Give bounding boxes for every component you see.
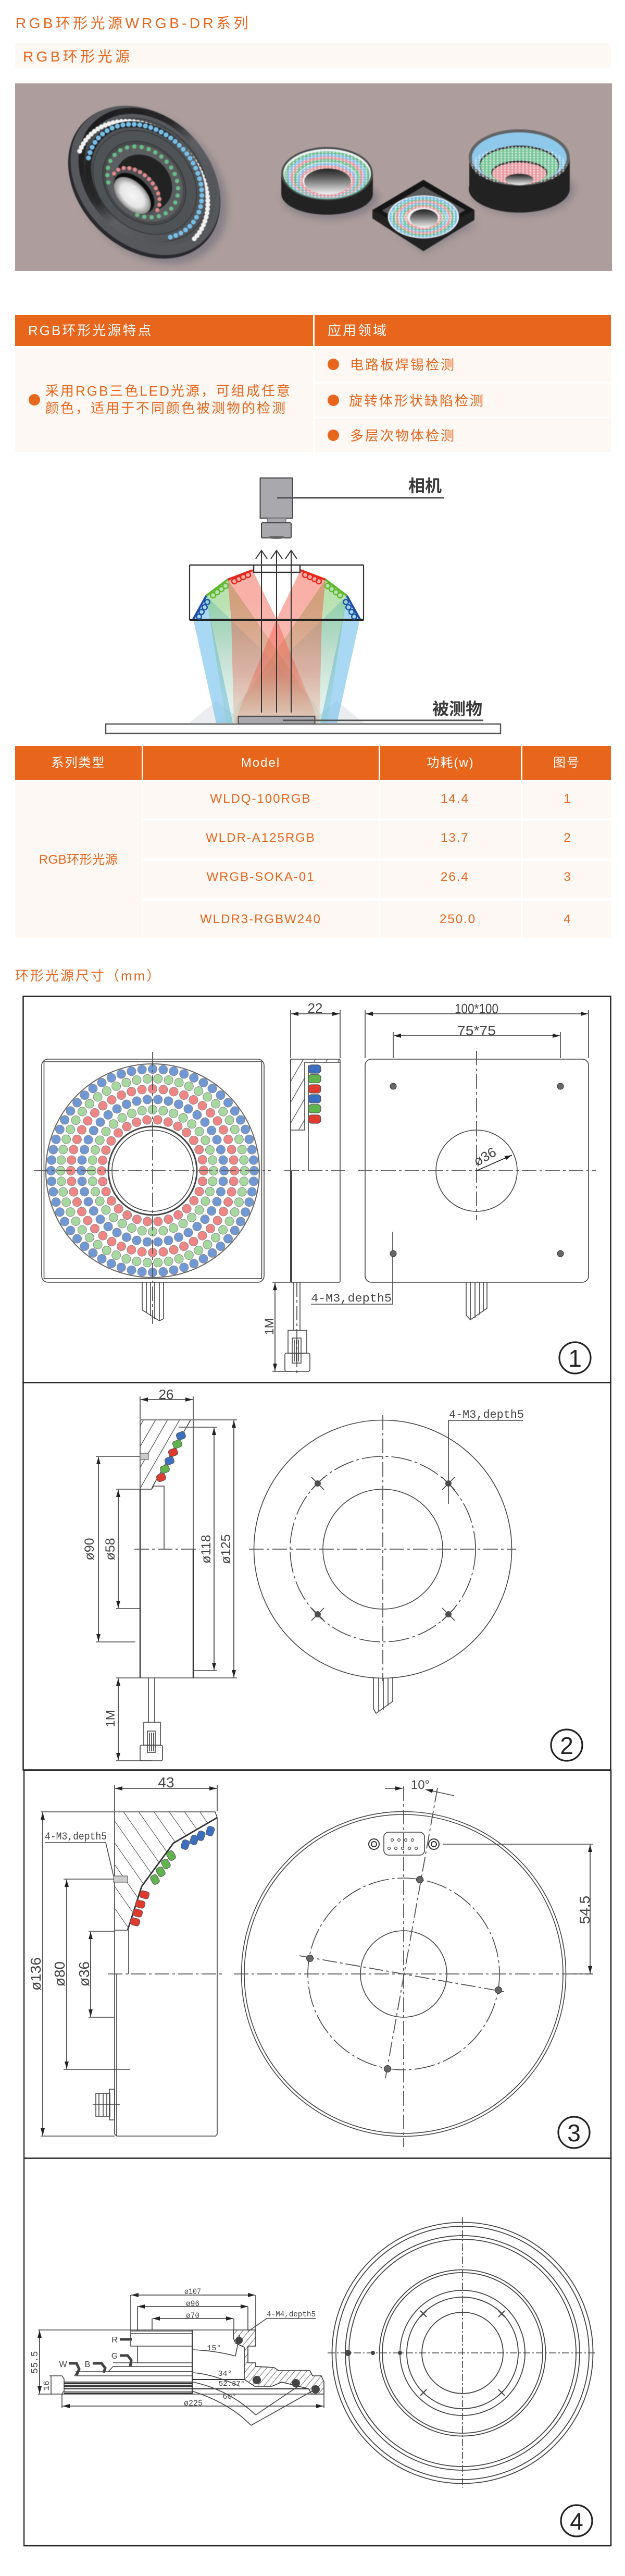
large stacked ring light (38, 76, 258, 295)
figure number 3 (558, 2117, 590, 2148)
header row (15, 746, 611, 780)
description text: 采用RGB三色LED光源，可组成任意 (45, 383, 292, 399)
section view: G (111, 2352, 118, 2361)
callout 4-M3,depth5: 4-M3,depth5 (311, 1292, 392, 1305)
cell: application 2: 旋转体形状缺陷检测 (349, 393, 485, 409)
camera (260, 478, 293, 539)
row 2 (143, 820, 611, 858)
cylinder ring light (469, 129, 574, 215)
section view: 4-M4,depth5 (267, 2310, 316, 2319)
side view: 22 (308, 1000, 322, 1016)
front view with LED rings (34, 1052, 271, 1324)
section view: ø80 (52, 1961, 68, 1986)
round ring light (281, 147, 378, 219)
cell: feature description (15, 348, 313, 452)
drawing 3: large ring light (23, 1770, 611, 2159)
header: features: RGB环形光源特点 (28, 323, 153, 338)
cell: application 1 (315, 348, 611, 382)
section view: 16 (42, 2381, 52, 2391)
front view (249, 1415, 516, 1713)
cell: application 3 (315, 419, 611, 452)
callout 4-M3,depth5 (311, 1232, 393, 1305)
section view: ø58 (103, 1538, 118, 1561)
section view: 26 (159, 1387, 173, 1402)
row 1: 14.4 (441, 792, 469, 806)
header row: 图号 (553, 756, 580, 770)
figure number 4 (561, 2505, 592, 2536)
drawing 4: stacked ring light (23, 2157, 611, 2547)
row 4: 250.0 (440, 912, 476, 926)
optical diagram: camera, ring light and object (105, 476, 501, 734)
left LED chain (193, 570, 253, 619)
section view: W (59, 2360, 67, 2369)
spec table (15, 746, 611, 938)
front view: 54.5 (577, 1896, 593, 1924)
cell: application 1: 电路板焊锡检测 (350, 357, 456, 373)
row 3: WRGB-SOKA-01 (206, 870, 315, 884)
callout 4-M3,depth5: 4-M3,depth5 (449, 1408, 524, 1421)
back view: ø36 (471, 1144, 499, 1169)
back view: 100*100 (455, 1001, 498, 1016)
section view (30, 2287, 324, 2425)
section view: ø36 (76, 1961, 92, 1986)
section view: 43 (158, 1774, 174, 1790)
band heading: RGB环形光源 (23, 48, 132, 65)
bullet (29, 394, 40, 406)
square ring light (372, 180, 477, 253)
row 3 (143, 861, 611, 898)
figure number 4: 4 (570, 2508, 583, 2535)
section view: ø125 (219, 1535, 233, 1564)
inspected object (239, 716, 315, 724)
upward arrows (256, 550, 297, 713)
ring light housing (190, 565, 364, 620)
section view: 15° (207, 2344, 221, 2353)
figure number 3: 3 (567, 2119, 581, 2146)
section view: ø225 (184, 2399, 203, 2408)
callout 4-M3,depth5: 4-M3,depth5 (45, 1831, 107, 1843)
right LED chain (301, 570, 360, 619)
stage (106, 724, 501, 733)
front view (328, 2217, 597, 2488)
header: features (15, 315, 313, 346)
callout 4-M3,depth5 (45, 1831, 114, 1876)
section view: ø118 (199, 1535, 214, 1564)
cell: application 3: 多层次物体检测 (350, 428, 456, 444)
series cell (15, 782, 142, 938)
cell: application 2 (315, 384, 611, 416)
label: camera: 相机 (408, 476, 442, 495)
section view: 60° (222, 2393, 237, 2401)
label: inspected object: 被测物 (432, 700, 482, 718)
section view: 52.37° (219, 2380, 245, 2388)
dimensions heading: 环形光源尺寸（mm） (15, 968, 161, 984)
header: applications (315, 315, 611, 346)
row 4 (143, 901, 611, 938)
side view (262, 1000, 345, 1375)
header row: Model (241, 756, 280, 770)
title: RGB环形光源WRGB-DR系列 (16, 15, 251, 31)
section view: R (111, 2336, 118, 2345)
section view: 1M (104, 1710, 118, 1727)
figure number 2 (551, 1729, 582, 1761)
row 3: 3 (564, 870, 572, 884)
row 2: 2 (564, 831, 572, 845)
front view: 10° (411, 1778, 430, 1792)
side view: 1M (262, 1318, 277, 1335)
features table (15, 315, 611, 452)
header row: 功耗(w) (427, 756, 474, 770)
cell: feature description: 颜色，适用于不同颜色被测物的检测 (45, 400, 287, 416)
row 2: 13.7 (441, 831, 469, 845)
row 1: WLDQ-100RGB (210, 792, 311, 806)
drawing 2: round ring light (22, 1382, 611, 1771)
series cell: RGB环形光源 (39, 853, 118, 867)
callout 4-M3,depth5 (448, 1408, 524, 1504)
section view: B (85, 2360, 90, 2369)
section view: ø70 (186, 2311, 199, 2321)
row 1 (143, 782, 611, 818)
drawing 1: square ring light (22, 996, 611, 1383)
figure number 1: 1 (568, 1345, 582, 1372)
figure number 2: 2 (560, 1732, 573, 1759)
header row: 系列类型 (51, 756, 105, 770)
section view (82, 1387, 237, 1761)
front view (234, 1778, 593, 2147)
header: applications: 应用领域 (328, 323, 388, 338)
section view: ø107 (184, 2287, 201, 2297)
row 4: WLDR3-RGBW240 (200, 912, 321, 926)
back view: 75*75 (457, 1023, 496, 1038)
section view (28, 1774, 222, 2136)
section view: ø96 (186, 2299, 199, 2309)
section view: 55.5 (30, 2351, 41, 2374)
section view: ø136 (28, 1957, 44, 1991)
back view (358, 1001, 596, 1320)
section view: ø90 (82, 1538, 97, 1561)
section view: 34° (218, 2370, 232, 2378)
row 2: WLDR-A125RGB (206, 831, 316, 845)
light beams (193, 570, 360, 723)
figure number 1 (559, 1342, 591, 1373)
product photo: RGB ring lights (15, 83, 612, 271)
row 4: 4 (564, 912, 572, 926)
section band: RGB环形光源 (15, 43, 611, 68)
scatter glow (189, 701, 245, 723)
row 1: 1 (564, 792, 572, 806)
row 3: 26.4 (441, 870, 469, 884)
